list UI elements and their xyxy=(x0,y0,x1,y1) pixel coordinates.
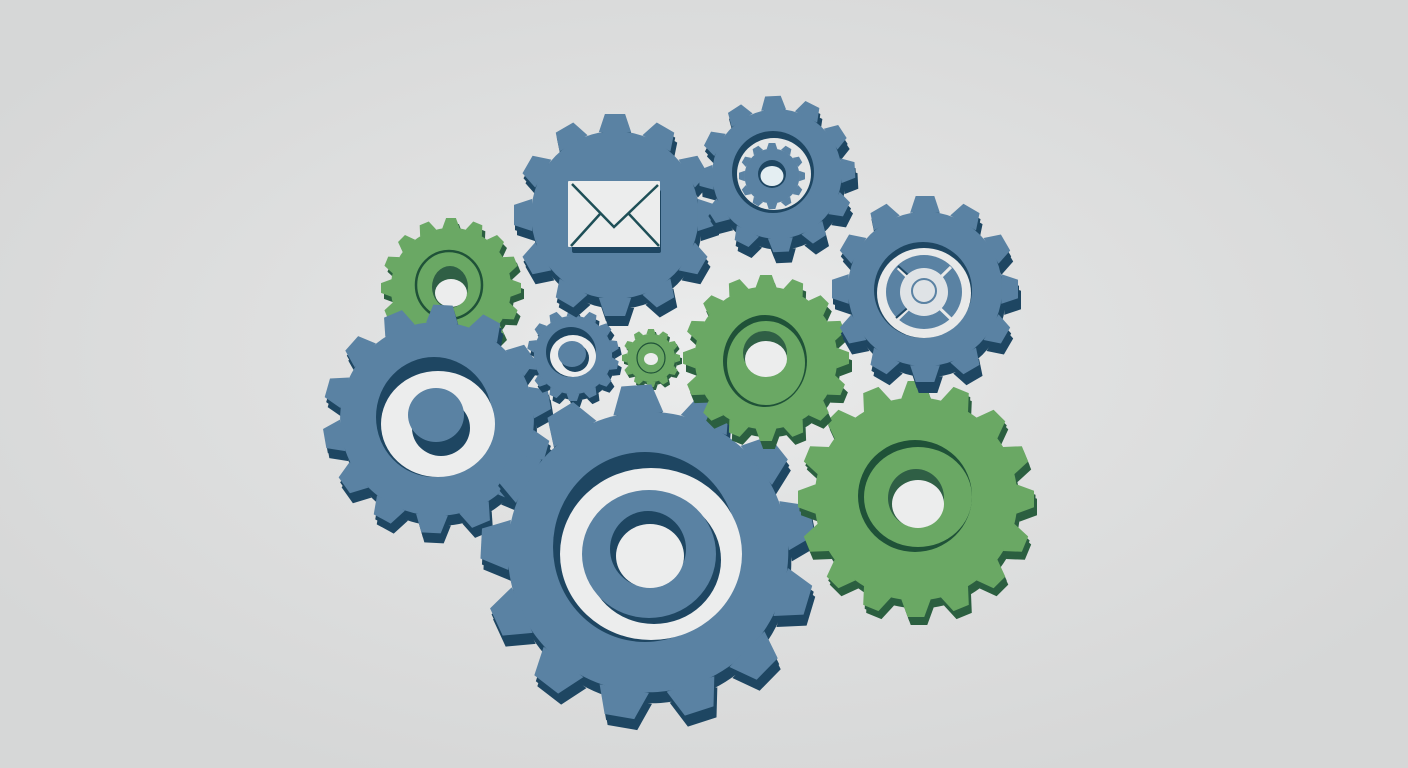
gear: small green top left xyxy=(381,218,524,364)
icon: inner cog xyxy=(739,143,805,209)
icon: envelope xyxy=(568,181,661,253)
gear: blue top right with inner cog xyxy=(695,92,862,267)
icon: target cross xyxy=(896,266,952,321)
gear: largest blue bottom centre xyxy=(468,374,831,743)
gear: blue with envelope xyxy=(514,114,719,326)
gear: blue right with target xyxy=(832,196,1021,393)
gear: large green right xyxy=(798,381,1037,625)
gear: small blue centre xyxy=(527,309,622,407)
gear: tiny green centre xyxy=(622,329,682,390)
gear: medium green centre xyxy=(683,275,852,449)
gear: large blue left xyxy=(316,299,561,549)
